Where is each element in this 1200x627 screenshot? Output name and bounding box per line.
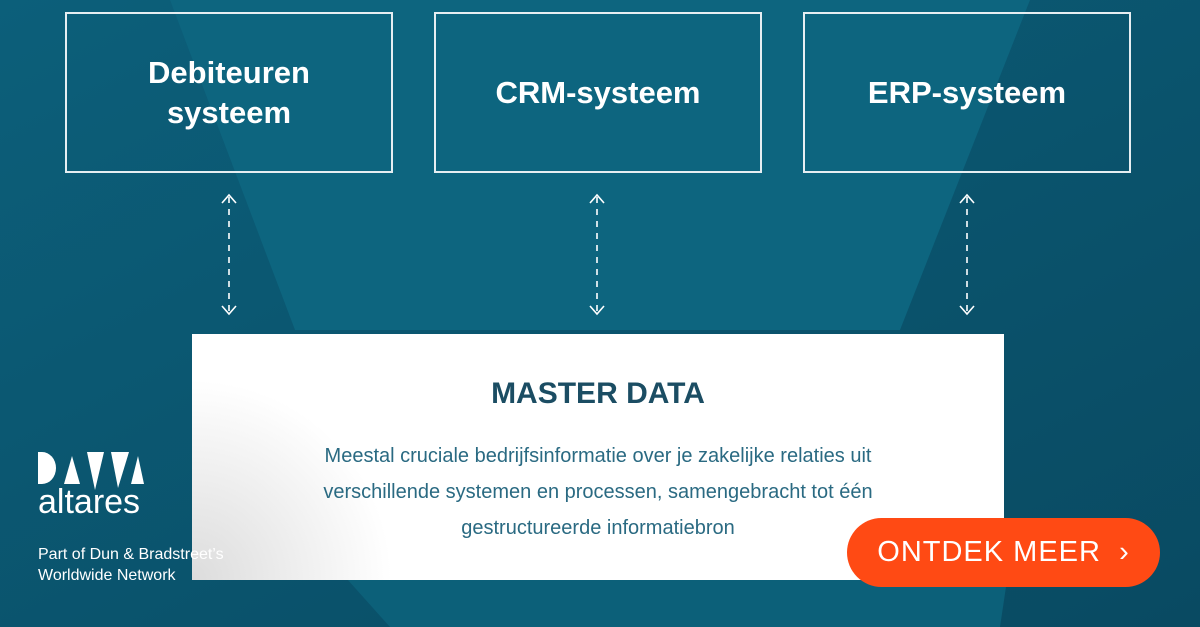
button: ontdek meer: ONTDEK MEER › <box>877 536 1130 568</box>
logo: Part of Dun & Bradstreet’s <box>38 546 224 563</box>
box: Debiteuren systeem: systeem <box>167 94 291 130</box>
box: CRM-systeem <box>434 12 762 173</box>
box: Debiteuren systeem <box>65 12 393 173</box>
logo: altares <box>38 483 140 521</box>
box: ERP-systeem <box>803 12 1131 173</box>
arrow 3 <box>960 195 974 314</box>
panel: master data <box>192 334 1004 580</box>
arrows <box>222 194 974 316</box>
button: ontdek meer <box>847 518 1160 587</box>
box: ERP-systeem: ERP-systeem <box>868 74 1066 110</box>
body text: gestructureerde informatiebron <box>461 517 735 539</box>
logo: Worldwide Network <box>38 567 176 584</box>
arrow 1 <box>222 195 236 314</box>
box: CRM-systeem: CRM-systeem <box>495 74 700 110</box>
icon: DATA <box>38 452 144 490</box>
arrow 2 <box>590 195 604 314</box>
body text: verschillende systemen en processen, samengebracht tot één <box>323 481 873 503</box>
logo <box>38 452 224 584</box>
body text: Meestal cruciale bedrijfsinformatie over je zakelijke relaties uit <box>325 445 871 467</box>
box: Debiteuren systeem: Debiteuren <box>148 54 310 90</box>
body text <box>323 445 873 539</box>
heading: MASTER DATA <box>491 377 705 410</box>
